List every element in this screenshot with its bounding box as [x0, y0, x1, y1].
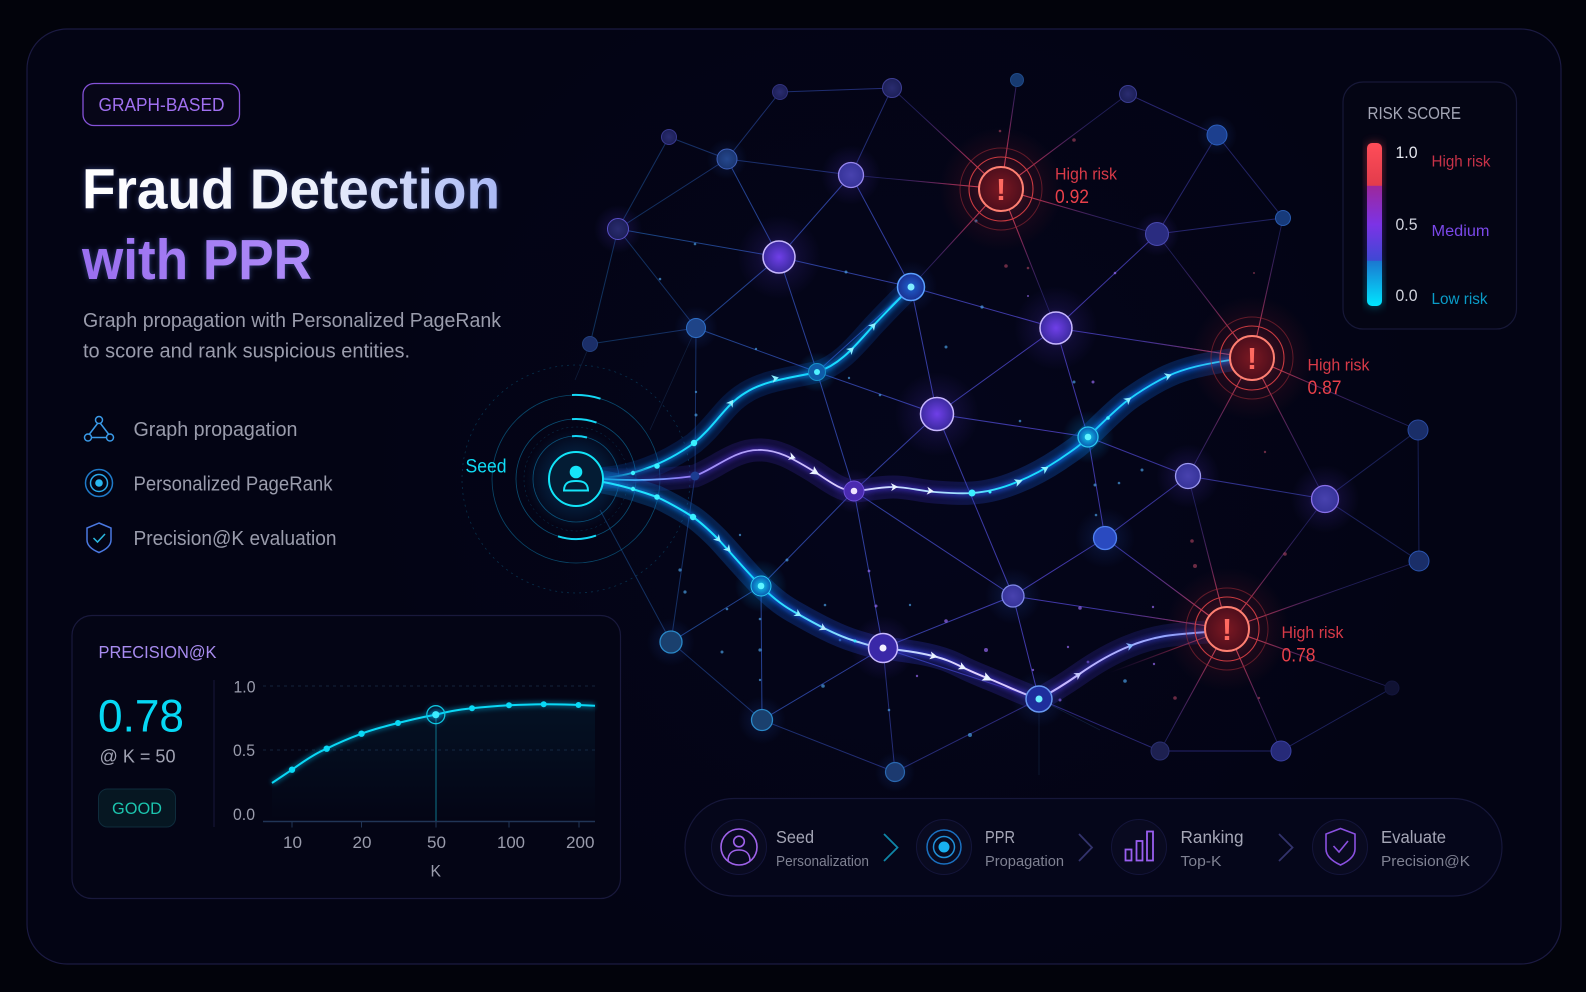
label: high risk 0.92 [1055, 164, 1117, 208]
line chart [233, 678, 595, 880]
feature text: Precision@K evaluation: Precision@K evaluation [134, 528, 336, 550]
seed node [526, 429, 626, 529]
high risk node 0.78: ! [1222, 612, 1232, 647]
label: high risk 0.87 [1308, 356, 1370, 399]
step: Ranking [1112, 820, 1244, 874]
legend scale values: 0.5 [1396, 215, 1418, 234]
graph nodes: purple hub nodes [594, 145, 1359, 624]
badge: GOOD [98, 789, 176, 827]
metric value: 0.78 [98, 690, 184, 742]
arrow [884, 834, 898, 861]
step: Evaluate: Evaluate [1381, 827, 1446, 847]
icon: seed person [564, 466, 588, 490]
label: high risk 0.92: High risk [1055, 164, 1117, 184]
chart axis labels: 20 [352, 833, 372, 852]
metric caption: @ K = 50 [100, 746, 176, 766]
label: high risk 0.87: 0.87 [1308, 378, 1342, 399]
dim base of edges into high-risk nodes [851, 80, 1419, 751]
panel: pipeline steps [685, 798, 1502, 896]
step: Ranking: Top-K [1180, 853, 1222, 870]
subtitle [83, 310, 502, 362]
graph edges [575, 80, 1419, 775]
chart axis labels: K [430, 862, 442, 880]
title: with PPR [81, 228, 312, 292]
step: Ranking: Ranking [1180, 827, 1244, 847]
step: PPR [916, 820, 1064, 874]
label: high risk 0.92: 0.92 [1055, 187, 1089, 208]
label: high risk 0.87: High risk [1308, 356, 1370, 374]
high risk node 0.78 [1165, 567, 1289, 691]
legend scale values [1396, 143, 1418, 305]
chart axis labels: 1.0 [234, 678, 256, 696]
legend level names [1432, 154, 1491, 308]
panel: risk score legend [1343, 82, 1516, 329]
label: high risk 0.78 [1282, 623, 1344, 666]
chart axis labels: 0.5 [233, 741, 255, 760]
seed concentric rings [462, 365, 690, 593]
graph nodes: blue nodes [647, 115, 1429, 792]
feature list [84, 416, 336, 552]
subtitle: Graph propagation with Personalized PageRank [83, 310, 502, 332]
chart points [289, 701, 582, 773]
chart axis labels: 0.0 [233, 805, 255, 824]
red edges: node 0.92 [851, 80, 1157, 328]
step: Evaluate: Precision@K [1381, 853, 1470, 870]
subtitle: to score and rank suspicious entities. [83, 340, 410, 362]
chart axis labels: 10 [283, 833, 302, 852]
high risk node 0.87: ! [1247, 341, 1257, 376]
edge particles [659, 130, 1287, 737]
badge: GRAPH-BASED [83, 84, 240, 126]
title: Fraud Detection [82, 158, 500, 222]
arrow [1079, 834, 1092, 861]
title [81, 158, 500, 292]
step: Seed: Personalization [776, 853, 869, 870]
high risk node 0.87 [1190, 296, 1314, 420]
icon: shield check [87, 523, 111, 552]
legend level names: Medium [1432, 223, 1490, 240]
step: Evaluate [1312, 820, 1470, 874]
legend colour bar [1367, 143, 1382, 306]
label: high risk 0.78: High risk [1282, 623, 1344, 642]
high risk node 0.92: ! [996, 172, 1006, 207]
path arrows [631, 320, 1173, 685]
step: Seed: Seed [776, 827, 814, 847]
feature text: Graph propagation: Graph propagation [134, 419, 298, 441]
legend level names: Low risk [1432, 291, 1488, 308]
propagation path: seed through purple nodes to high risk 0.87 [603, 360, 1230, 493]
panel heading: PRECISION@K [98, 642, 217, 662]
graph nodes: dim outer nodes [582, 74, 1399, 760]
feature text: Personalized PageRank: Personalized PageRank [134, 474, 333, 496]
badge: GRAPH-BASED: GRAPH-BASED [98, 95, 224, 115]
step: PPR: Propagation [985, 853, 1064, 870]
label: high risk 0.78: 0.78 [1282, 646, 1316, 666]
chart area [272, 704, 595, 821]
badge: GOOD: GOOD [112, 799, 162, 818]
legend scale values: 1.0 [1396, 143, 1418, 162]
red edges: node 0.87 [1056, 218, 1418, 499]
chart curve [272, 704, 595, 783]
graph nodes: active path nodes [735, 261, 1114, 727]
red edges: node 0.78 [1013, 476, 1419, 751]
icon: personalized pagerank [86, 470, 112, 496]
step: Seed [712, 820, 869, 874]
chart axis labels [233, 678, 594, 880]
propagation path: seed through lower nodes to high risk 0.78 [603, 482, 1207, 699]
step: PPR: PPR [985, 827, 1015, 847]
legend heading: RISK SCORE [1368, 103, 1461, 123]
propagation path: seed to upper node [603, 287, 911, 478]
panel: precision@K [72, 616, 620, 898]
high risk node 0.92 [939, 127, 1063, 251]
arrow [1279, 834, 1292, 861]
chart axis labels: 100 [497, 833, 525, 852]
legend level names: High risk [1432, 154, 1491, 170]
chart axis labels: 50 [427, 833, 446, 852]
chart axis labels: 200 [566, 833, 594, 852]
legend scale values: 0.0 [1396, 286, 1418, 305]
icon: graph propagation [84, 416, 114, 441]
seed label: Seed [466, 456, 506, 478]
